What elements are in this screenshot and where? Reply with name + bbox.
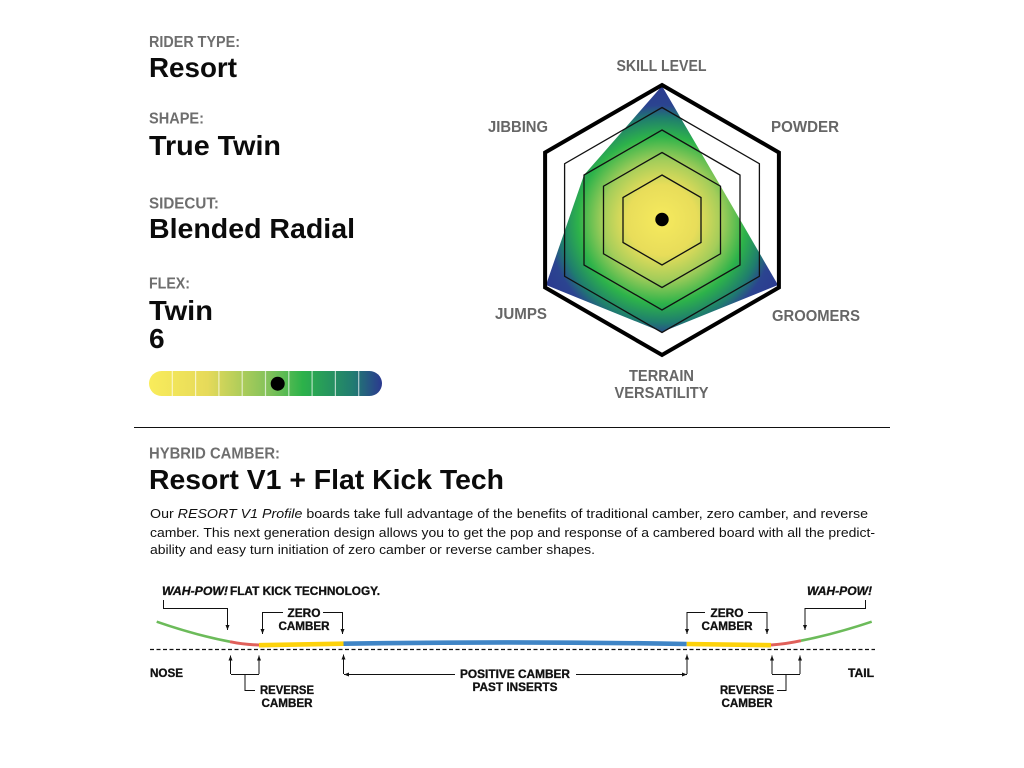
callout: right reverse camber bbox=[720, 656, 800, 710]
radar axis labels: JIBBING bbox=[488, 119, 548, 136]
spec: rider type: RIDER TYPE: bbox=[149, 34, 240, 51]
camber profile diagram bbox=[150, 586, 875, 710]
spec: sidecut: SIDECUT: bbox=[149, 196, 219, 212]
radar data shape bbox=[546, 86, 778, 332]
callout: right zero camber: CAMBER bbox=[702, 621, 753, 633]
board profile line bbox=[157, 622, 872, 645]
radar axis labels: VERSATILITY bbox=[614, 385, 709, 402]
callout: left reverse camber: CAMBER bbox=[262, 698, 313, 710]
callout: left zero camber: ZERO bbox=[288, 608, 321, 620]
callout: right wah-pow: WAH-POW! bbox=[807, 586, 872, 598]
radar axis labels: TERRAIN bbox=[629, 368, 694, 385]
spec: sidecut bbox=[149, 196, 355, 244]
callout: positive camber: PAST INSERTS bbox=[472, 682, 558, 694]
camber description: ability and easy turn initiation of zero camber or reverse camber shapes. bbox=[150, 543, 595, 557]
radar centre dot bbox=[655, 213, 669, 226]
spec: flex: FLEX: bbox=[149, 276, 190, 292]
callout: positive camber bbox=[344, 654, 687, 694]
camber heading: Resort V1 + Flat Kick Tech bbox=[149, 464, 504, 495]
radar axis labels: SKILL LEVEL bbox=[616, 58, 706, 75]
callout: positive camber: POSITIVE CAMBER bbox=[460, 669, 571, 681]
label: nose: NOSE bbox=[150, 668, 183, 680]
radar axis labels: GROOMERS bbox=[772, 308, 860, 325]
callout: left reverse camber: REVERSE bbox=[260, 685, 314, 697]
spec: flex: 6 bbox=[149, 323, 165, 354]
callout: flat kick technology: WAH-POW! bbox=[162, 586, 228, 598]
radar axis labels bbox=[488, 58, 860, 402]
flex marker dot bbox=[271, 377, 285, 391]
camber description bbox=[150, 507, 875, 557]
spec: sidecut: Blended Radial bbox=[149, 213, 355, 244]
radar chart bbox=[545, 85, 779, 355]
callout: right wah-pow bbox=[805, 586, 872, 630]
label: tail: TAIL bbox=[848, 668, 874, 680]
spec: shape: SHAPE: bbox=[149, 110, 204, 128]
spec: rider type: Resort bbox=[149, 52, 237, 83]
flex rating bar bbox=[149, 371, 382, 396]
spec: shape: True Twin bbox=[149, 130, 281, 161]
spec: shape bbox=[149, 110, 281, 161]
callout: right reverse camber: CAMBER bbox=[722, 698, 773, 710]
callout: left zero camber: CAMBER bbox=[278, 621, 330, 633]
callout: right reverse camber: REVERSE bbox=[720, 685, 774, 697]
callout: right zero camber bbox=[687, 608, 767, 634]
callout: left reverse camber bbox=[230, 656, 314, 710]
spec: rider type bbox=[149, 34, 240, 83]
callout: flat kick technology: FLAT KICK TECHNOLOGY. bbox=[230, 586, 380, 598]
spec: flex: Twin bbox=[149, 295, 213, 326]
camber heading: HYBRID CAMBER: bbox=[149, 445, 280, 462]
callout: right zero camber: ZERO bbox=[710, 608, 744, 620]
camber heading bbox=[149, 445, 504, 495]
camber description: Our RESORT V1 Profile boards take full advantage of the benefits of traditional camber, zero camber, and reverse bbox=[150, 507, 868, 521]
radar axis labels: POWDER bbox=[771, 119, 839, 136]
camber description: camber. This next generation design allows you to get the pop and response of a cambered board with all the predict- bbox=[150, 526, 875, 540]
callout: flat kick technology bbox=[162, 586, 380, 630]
spec: flex bbox=[149, 276, 213, 354]
radar axis labels: JUMPS bbox=[495, 306, 547, 323]
callout: left zero camber bbox=[262, 608, 342, 634]
